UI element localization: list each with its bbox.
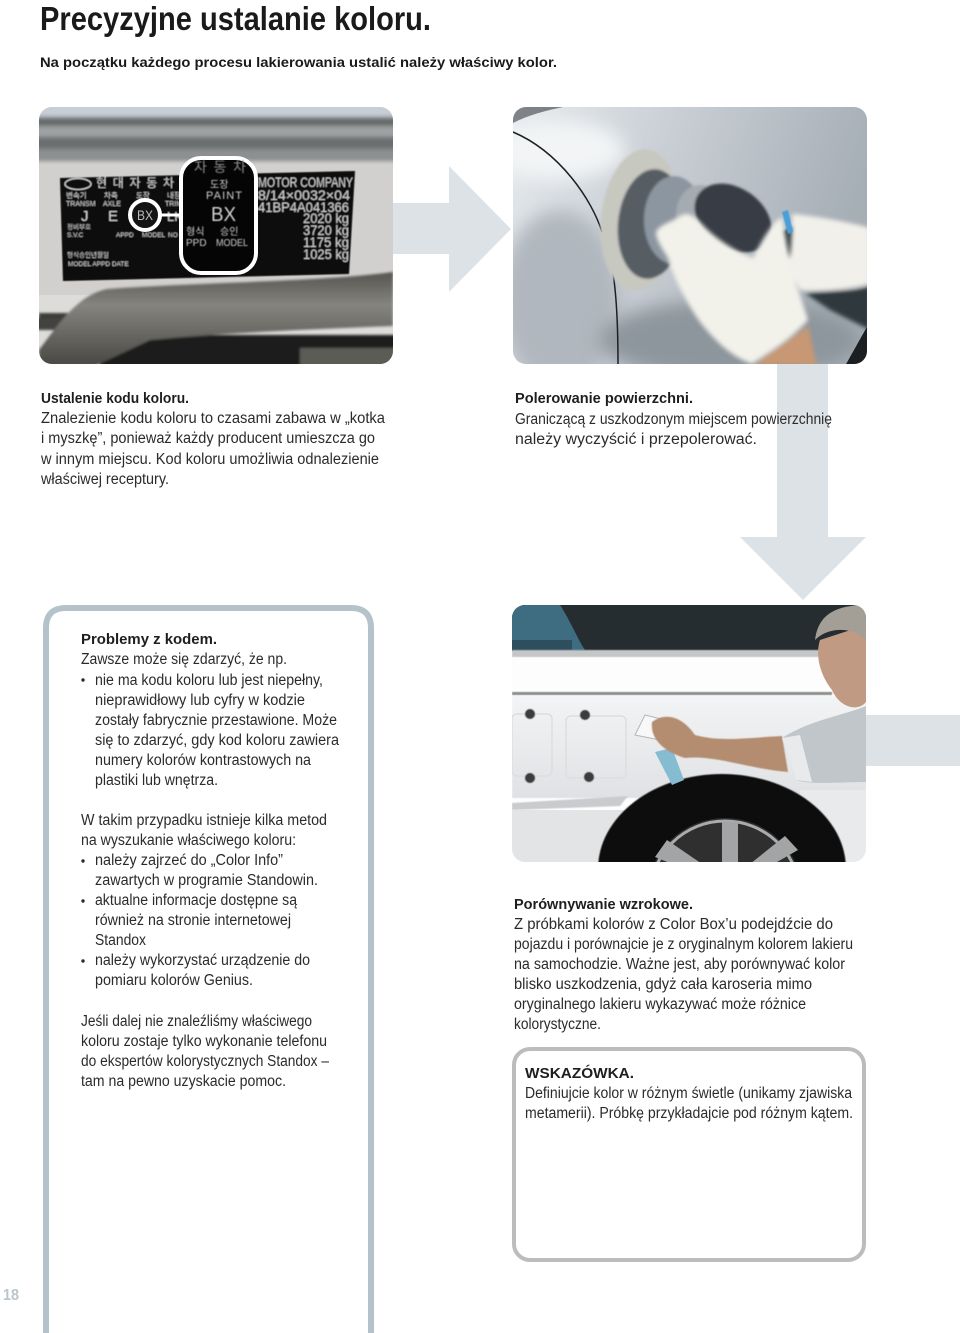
panel text: problem list: numery kolorów kontrastowych na [95, 752, 311, 769]
photo: paint code label [30, 98, 402, 367]
connector and ring around the code [162, 214, 179, 216]
panel text: problem list [81, 632, 339, 789]
photo: paint code label: TRIM [165, 201, 182, 208]
hose and engine bay [30, 272, 400, 367]
panel text: closing advice: do ekspertów kolorystycznych Standox – [81, 1053, 329, 1070]
photo: paint code label: LK [167, 209, 183, 224]
arrow: right, from step 1 to step 2 [393, 166, 511, 292]
text: step 1 code: w innym miejscu. Kod koloru umożliwia odnalezienie [40, 451, 379, 468]
panel text: methods list: zawartych w programie Standowin. [95, 872, 318, 889]
photo: paint code label: 변속기 [66, 191, 87, 200]
photo: paint code label: TRANSM [66, 201, 96, 208]
panel text: methods list: W takim przypadku istnieje kilka metod [81, 812, 327, 829]
panel gap lines [513, 132, 602, 232]
text: step 1 code: właściwej receptury. [40, 471, 169, 488]
panel text: methods list [81, 812, 327, 989]
arm and hand [652, 717, 788, 772]
text: step 2 polishing [515, 391, 832, 448]
panel text: closing advice [81, 1013, 329, 1090]
panel text: problem list: nieprawidłowy lub cyfry w kodzie [95, 692, 305, 709]
panel: problems with the code [46, 608, 371, 1333]
photo: polishing the surface [513, 107, 867, 364]
text: step 1 code: Znalezienie kodu koloru to czasami zabawa w „kotka [41, 410, 385, 427]
photo: paint code label: 형식 [186, 226, 204, 238]
callout: tip box [514, 1049, 864, 1260]
text: step 1 code: Ustalenie kodu koloru. [41, 391, 189, 407]
panel text: methods list: aktualne informacje dostępne są [95, 892, 297, 909]
photo: paint code label: 도장 [136, 190, 150, 200]
photo: paint code label: 3720 kg [303, 223, 349, 238]
photo: paint code label: E [108, 208, 118, 225]
cloth and bottle [634, 714, 660, 740]
photo: paint code label: MOTOR COMPANY [258, 174, 353, 190]
text: step 2 polishing: Polerowanie powierzchni. [515, 391, 693, 407]
panel text: problem list: nie ma kodu koloru lub jest niepełny, [95, 672, 323, 689]
panel text: closing advice: koloru zostaje tylko wykonanie telefonu [81, 1033, 327, 1050]
photo: visual comparison at the car [512, 605, 866, 862]
photo: paint code label: PAINT [206, 190, 242, 202]
text: step 1 code [40, 391, 385, 488]
photo: paint code label: 정비부호 [67, 222, 91, 231]
photo: paint code label: 자동차 [194, 159, 246, 175]
panel text: problem list: Problemy z kodem. [81, 632, 217, 648]
photo: paint code label: 형식승인년월일 [67, 250, 109, 259]
panel text: methods list: należy wykorzystać urządzenie do [95, 952, 310, 969]
shirt [782, 706, 866, 783]
photo: paint code label: APPD [116, 232, 134, 239]
arrow: down, from step 2 to step 3 [740, 364, 866, 600]
wheel arch and wheel [598, 773, 846, 862]
photo: paint code label: 차축 [104, 191, 118, 200]
photo: paint code label: AXLE [103, 201, 121, 208]
text: step 3 visual comparison: kolorystyczne. [514, 1016, 601, 1033]
photo: paint code label: 41BP4A041366 [258, 200, 349, 215]
panel text: methods list: Standox [95, 932, 146, 949]
photo: paint code label: S.V.C [67, 232, 84, 239]
text: step 3 visual comparison: Z próbkami kolorów z Color Box’u podejdźcie do [514, 916, 833, 933]
photo: paint code label: 승인 [220, 226, 238, 238]
photo: paint code label: PPD [186, 238, 207, 249]
text: step 2 polishing: należy wyczyścić i przepolerować. [515, 431, 757, 448]
panel text: problem list: zostały fabrycznie przestawione. Może [95, 712, 337, 729]
panel text: problem list: Zawsze może się zdarzyć, że np. [81, 651, 287, 668]
panel text: problem list: plastiki lub wnętrza. [95, 772, 218, 789]
photo: paint code label: 2020 kg [303, 211, 349, 226]
photo: paint code label: 1175 kg [303, 235, 349, 250]
photo: paint code label: BX [211, 204, 236, 226]
photo: paint code label: 현대자동차 [96, 176, 174, 190]
text: step 3 visual comparison: pojazdu i porównajcie je z oryginalnym kolorem lakieru [514, 936, 853, 953]
text: step 3 visual comparison: Porównywanie wzrokowe. [514, 897, 693, 913]
callout: tip box: Definiujcie kolor w różnym świetle (unikamy zjawiska [525, 1085, 852, 1102]
text: step 1 code: i myszkę”, ponieważ każdy producent umieszcza go [41, 430, 375, 447]
panel text: closing advice: Jeśli dalej nie znaleźliśmy właściwego [81, 1013, 312, 1030]
label plate [60, 171, 355, 281]
photo: paint code label: MODEL APPD DATE [68, 261, 129, 268]
subtitle: Na początku każdego procesu lakierowania ustalić należy właściwy kolor. [40, 54, 557, 70]
arrow: stub from step 3 to the next page [866, 715, 960, 766]
polisher [598, 149, 795, 291]
photo: paint code label: 도장 [210, 179, 228, 191]
panel text: closing advice: tam na pewno uzyskacie pomoc. [81, 1073, 286, 1090]
photo: paint code label: BX [137, 208, 153, 223]
photo: paint code label: NO [168, 232, 178, 239]
door panel marks [512, 714, 626, 778]
panel text: methods list: również na stronie internetowej [95, 912, 291, 929]
photo: paint code label: MODEL [216, 238, 248, 249]
panel text: methods list: na wyszukanie właściwego koloru: [81, 832, 296, 849]
text: step 3 visual comparison: na samochodzie. Ważne jest, aby porównywać kolor [514, 956, 845, 973]
sill strip [512, 796, 628, 810]
callout: tip box: metamerii). Próbkę przykładajcie pod różnym kątem. [525, 1105, 853, 1122]
photo: paint code label: 1025 kg [303, 247, 349, 262]
head [818, 625, 866, 707]
gloved hand [656, 214, 870, 366]
photo: paint code label: 8/14×0032×04 [258, 188, 351, 203]
panel text: methods list: pomiaru kolorów Genius. [95, 972, 253, 989]
photo: paint code label: 내장 [167, 190, 181, 200]
text: step 3 visual comparison [514, 897, 853, 1033]
text: step 3 visual comparison: blisko uszkodzenia, gdyż cała karoseria mimo [514, 976, 812, 993]
text: step 3 visual comparison: oryginalnego lakieru wykazywać może różnice [514, 996, 806, 1013]
callout: tip box: WSKAZÓWKA. [525, 1064, 634, 1082]
text: step 2 polishing: Graniczącą z uszkodzonym miejscem powierzchnię [515, 411, 832, 428]
magnified code box [181, 158, 256, 273]
photo: paint code label: J [81, 208, 88, 225]
panel text: methods list: należy zajrzeć do „Color Info” [95, 852, 283, 869]
panel text: problem list: się to zdarzyć, gdy kod koloru zawiera [95, 732, 339, 749]
title: Precyzyjne ustalanie koloru. [40, 0, 431, 37]
page number: 18 [3, 1287, 19, 1304]
photo: paint code label: MODEL [142, 232, 166, 239]
